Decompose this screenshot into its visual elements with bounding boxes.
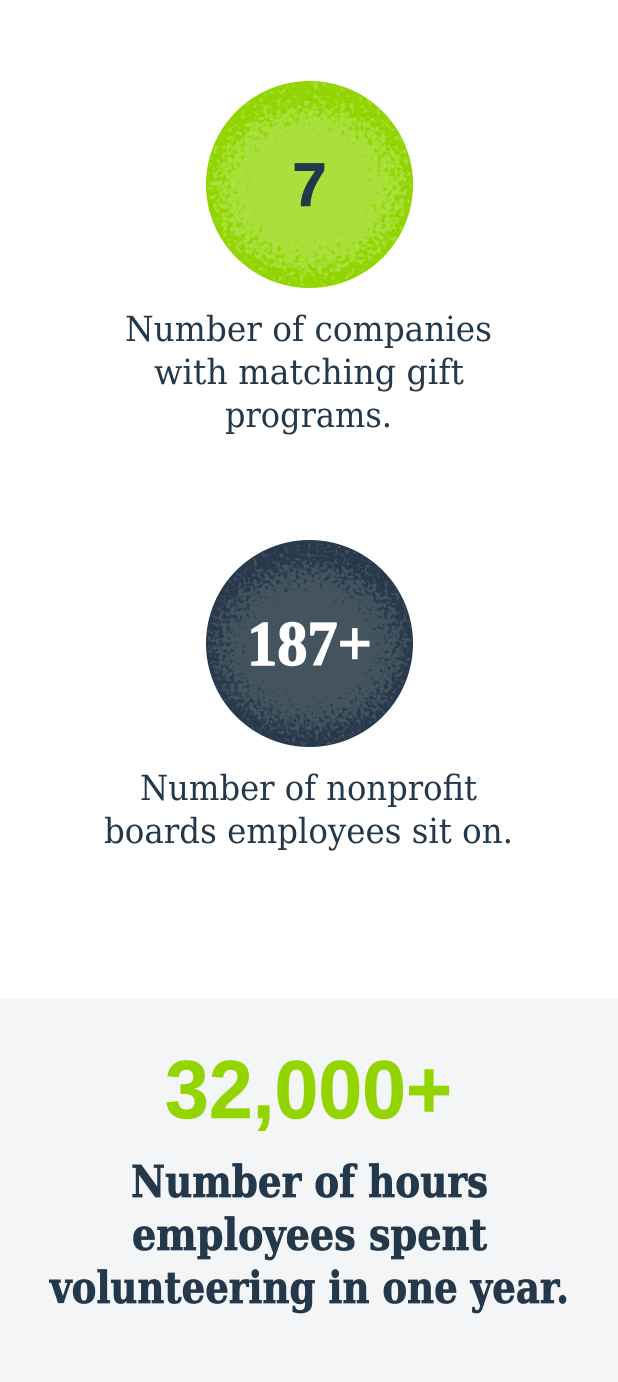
- text block: nonprofit boards description: Number of nonprofit: [140, 769, 477, 809]
- panel: companies with matching gift programs: [125, 81, 492, 436]
- icon: textured green circle with number 7: 7: [292, 151, 326, 219]
- text block: companies description: with matching gift: [154, 353, 464, 393]
- text block: companies description: programs.: [225, 396, 392, 436]
- panel: nonprofit boards: [104, 540, 513, 852]
- panel: volunteer hours: [0, 999, 618, 1382]
- text block: companies description: [125, 310, 492, 436]
- heading: volunteer hours description: employees spent: [132, 1210, 488, 1261]
- icon: textured navy circle with number 187+: [206, 540, 413, 747]
- text block: nonprofit boards description: boards employees sit on.: [104, 812, 513, 852]
- heading: volunteer hours description: Number of hours: [131, 1157, 488, 1208]
- stat: 32,000+: 32,000+: [165, 1043, 452, 1136]
- heading: volunteer hours description: [49, 1157, 569, 1314]
- icon: textured green circle with number 7: [206, 81, 413, 288]
- text block: nonprofit boards description: [104, 769, 513, 852]
- icon: textured navy circle with number 187+: 187+: [247, 608, 372, 679]
- text block: companies description: Number of companies: [125, 310, 492, 350]
